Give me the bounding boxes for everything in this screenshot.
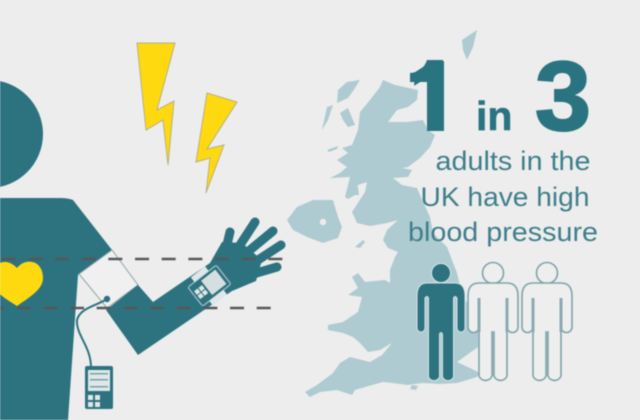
icon: lightning bolt small [196,93,237,193]
icon: filled person [417,264,465,381]
icon: lightning bolt large [137,43,175,165]
caption: blood pressure [408,217,598,247]
headline: 1 in 3: 3 [535,41,591,151]
headline: 1 in 3: in [476,93,512,139]
icon: outlined person 3 [522,262,572,380]
wrist monitor [184,260,235,311]
person with blood pressure monitor [0,80,284,420]
torso [0,198,112,420]
dashed lines [0,259,284,308]
head [0,80,43,188]
caption [408,146,598,247]
handheld monitor [85,366,113,409]
headline: 1 in 3 [409,59,590,133]
icon: outlined person 2 [468,262,518,380]
heart [0,262,43,306]
caption: adults in the [436,146,590,176]
map: United Kingdom [287,30,480,397]
caption: UK have high [420,182,590,212]
monitor cable [77,299,107,366]
forearm and hand [106,222,281,355]
headline: 1 in 3: 1 [408,41,463,151]
arm cuff [79,250,138,308]
